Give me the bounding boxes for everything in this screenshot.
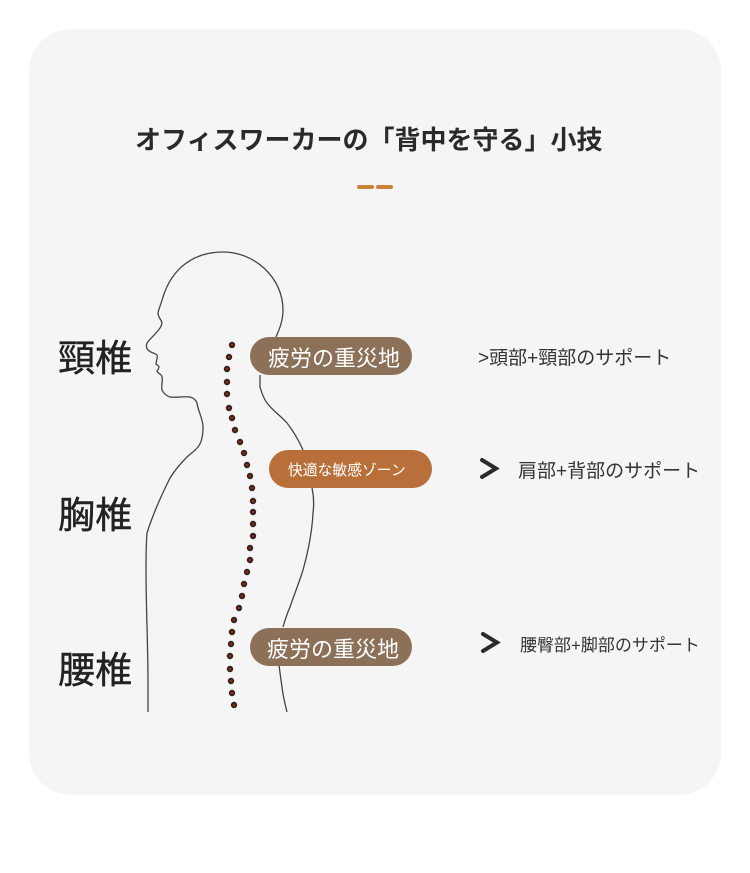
pill: fatigue zone upper — [250, 337, 412, 375]
icon: arrow shoulders — [480, 458, 500, 480]
pill: fatigue zone upper: 疲労の重災地 — [268, 346, 400, 371]
icon: arrow hips — [480, 632, 501, 654]
title: オフィスワーカーの「背中を守る」小技 — [135, 125, 602, 155]
text: hips and legs support: 腰臀部+脚部のサポート — [520, 636, 700, 655]
label: thoracic spine: 胸椎 — [58, 495, 132, 536]
lower back outline — [279, 665, 287, 712]
label: cervical spine: 頸椎 — [58, 338, 132, 379]
title accent dashes — [357, 185, 393, 189]
back outline — [283, 488, 314, 627]
back of neck outline — [260, 375, 303, 450]
pill: sensitive zone: 快適な敏感ゾーン — [288, 463, 406, 479]
head and front of body outline — [146, 252, 283, 712]
pill: fatigue zone lower — [250, 628, 412, 666]
label: lumbar spine: 腰椎 — [58, 650, 132, 691]
pill: fatigue zone lower: 疲労の重災地 — [267, 637, 399, 662]
spine dots — [225, 343, 255, 707]
pill: sensitive zone — [269, 450, 432, 488]
text: head and neck support: >頭部+頸部のサポート — [478, 348, 671, 369]
text: shoulder and back support: 肩部+背部のサポート — [518, 461, 700, 482]
